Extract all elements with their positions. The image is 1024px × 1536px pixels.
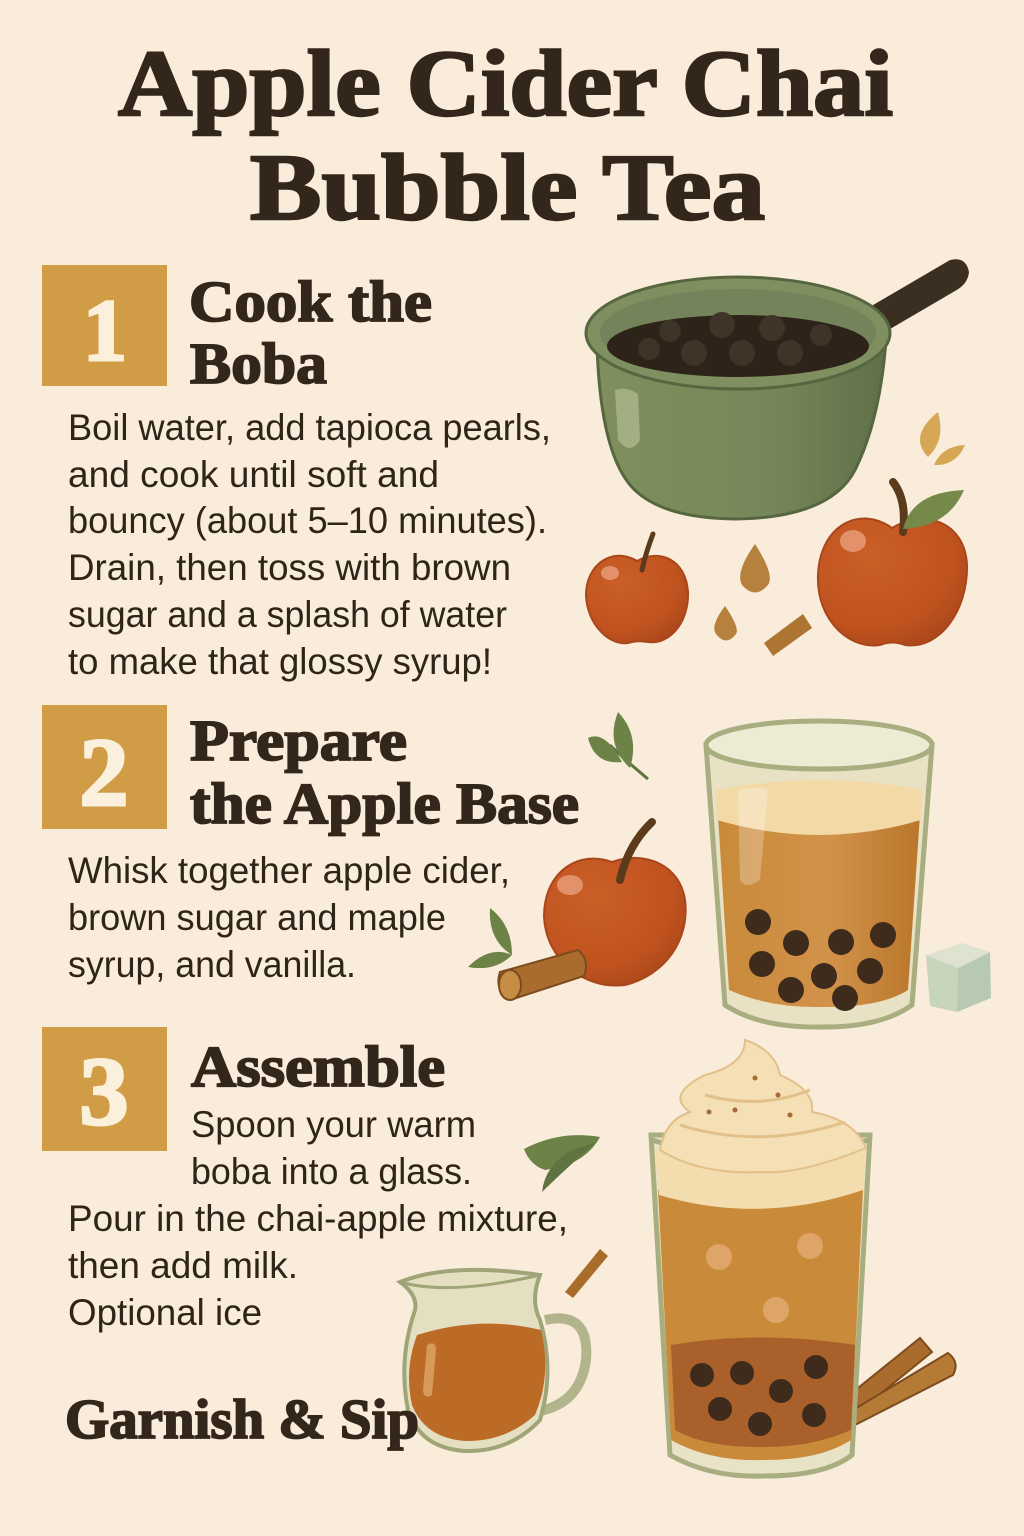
step 2 text: syrup, and vanilla. [68,944,356,985]
icon: drops and cinnamon piece [714,544,812,656]
step 3 text: Optional ice [68,1292,262,1333]
step 2 text [68,850,510,985]
illustration: whipped cream drink [651,1040,870,1476]
step 3 text: then add milk. [68,1245,298,1286]
icon: small apple [586,534,688,643]
step 1 text: to make that glossy syrup! [68,641,492,682]
icon: cinnamon stick small [565,1249,608,1298]
step 3 heading: Assemble [191,1034,445,1099]
step 2 heading: Prepare [190,708,407,773]
step 3 text: Pour in the chai-apple mixture, [68,1198,568,1239]
step 3 text: boba into a glass. [191,1151,472,1192]
illustration: pot of boba [586,259,969,519]
step 3 text [68,1104,568,1333]
icon: ice cube [926,943,991,1012]
icon: large apple [818,482,967,646]
step 1 text [68,407,551,682]
step 2 badge [42,705,167,829]
step 1 heading: Boba [190,331,327,396]
step 1 heading: Cook the [189,269,432,334]
step 1 badge [42,265,167,386]
step 1 text: sugar and a splash of water [68,594,507,635]
step 3 badge: 3 [80,1038,128,1146]
step 1 text: and cook until soft and [68,454,439,495]
step 1 text: bouncy (about 5–10 minutes). [68,500,547,541]
illustration: iced boba glass [706,721,932,1027]
title [118,32,893,240]
step 3 text: Spoon your warm [191,1104,476,1145]
step 2 heading [190,708,579,836]
title: Apple Cider Chai [118,32,893,136]
step 2 badge: 2 [80,719,128,827]
illustration: pitcher [400,1270,586,1451]
step 1 badge: 1 [83,283,127,380]
step 1 text: Boil water, add tapioca pearls, [68,407,551,448]
icon: leaf sprig top [588,712,648,779]
step 2 heading: the Apple Base [190,771,579,836]
step 2 text: Whisk together apple cider, [68,850,510,891]
footer heading: Garnish & Sip [65,1389,419,1451]
step 2 text: brown sugar and maple [68,897,446,938]
icon: leaf [524,1135,600,1192]
title: Bubble Tea [250,136,765,240]
step 1 heading [189,269,432,396]
icon: apple with cinnamon [468,822,686,1000]
icon: cinnamon sticks [853,1338,956,1426]
icon: falling leaves [920,412,965,465]
step 1 text: Drain, then toss with brown [68,547,511,588]
step 3 badge [42,1027,167,1151]
